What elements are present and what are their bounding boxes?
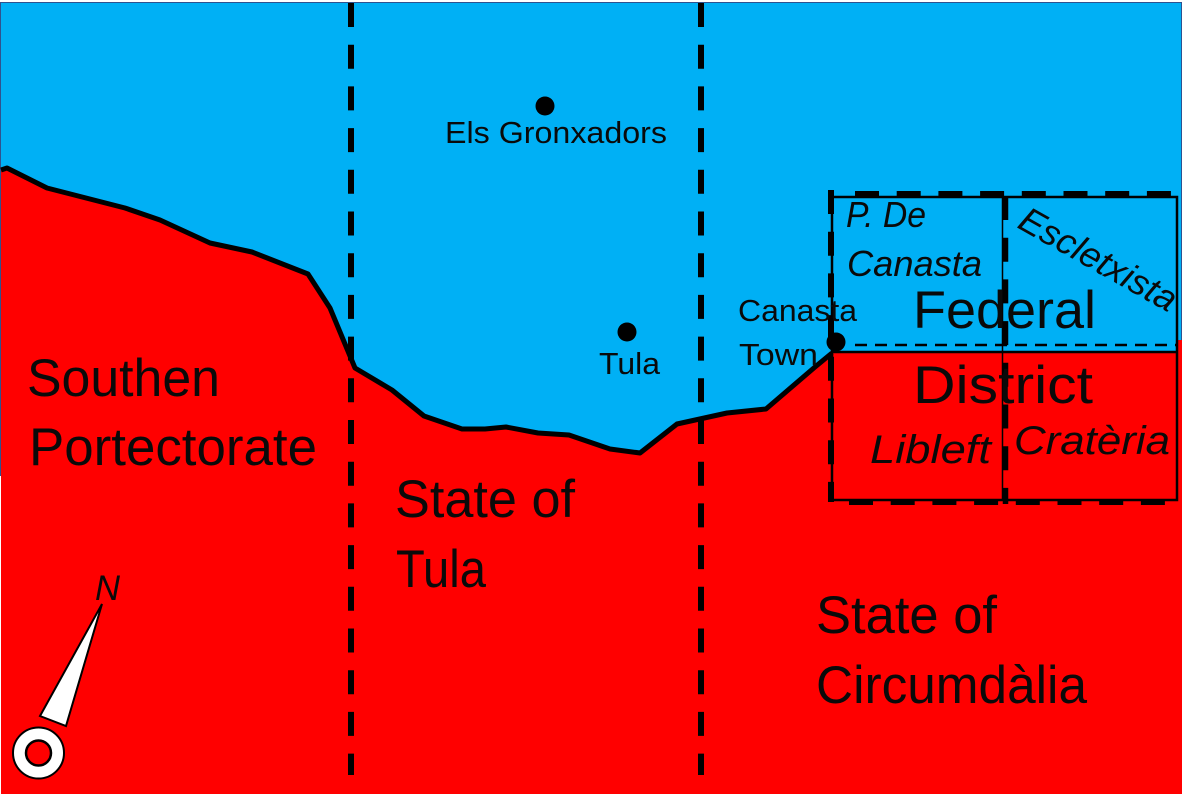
state border: Southen Portectorate and Tula: [348, 3, 354, 775]
label: Tula city: Tula: [599, 346, 661, 381]
label: Southen Portectorate: [27, 349, 317, 477]
label: Els Gronxadors: Els Gronxadors: [445, 115, 667, 150]
label: Cratèria: Cratèria: [1014, 419, 1170, 463]
federal district box: [831, 190, 1177, 504]
label: P. De Canasta: Canasta: [847, 243, 982, 284]
label: Canasta Town: Canasta: [738, 293, 858, 328]
label: State of Circumdàlia: [816, 586, 1087, 715]
icon: north compass: [13, 569, 121, 778]
coastline: [1, 168, 832, 453]
label: State of Tula: Tula: [396, 540, 486, 599]
map background: water: [1, 2, 1182, 476]
label: Southen Portectorate: Portectorate: [29, 418, 317, 477]
label: P. De Canasta: P. De: [846, 194, 926, 235]
land mass: [1, 168, 1182, 794]
city marker: Canasta Town: [826, 332, 846, 352]
label: State of Circumdàlia: State of: [816, 586, 997, 645]
state border: Tula and Circumdàlia: [698, 3, 704, 775]
label: Canasta Town: [738, 293, 858, 372]
label: State of Tula: [395, 470, 575, 599]
label: N: N: [95, 569, 121, 608]
label: State of Tula: State of: [395, 470, 575, 529]
label: Southen Portectorate: Southen: [27, 349, 220, 408]
label: Federal District: [913, 281, 1096, 415]
label: Federal District: District: [913, 356, 1093, 415]
city marker: Els Gronxadors: [536, 96, 554, 116]
city marker: Tula: [618, 322, 636, 342]
label: State of Circumdàlia: Circumdàlia: [816, 656, 1087, 715]
label: P. De Canasta: [846, 194, 982, 284]
label: Canasta Town: Town: [739, 337, 818, 372]
label: Federal District: Federal: [913, 281, 1096, 340]
label: Libleft: Libleft: [870, 428, 993, 472]
label: Escletxista: Escletxista: [1012, 198, 1184, 320]
map edge: [0, 2, 1182, 476]
